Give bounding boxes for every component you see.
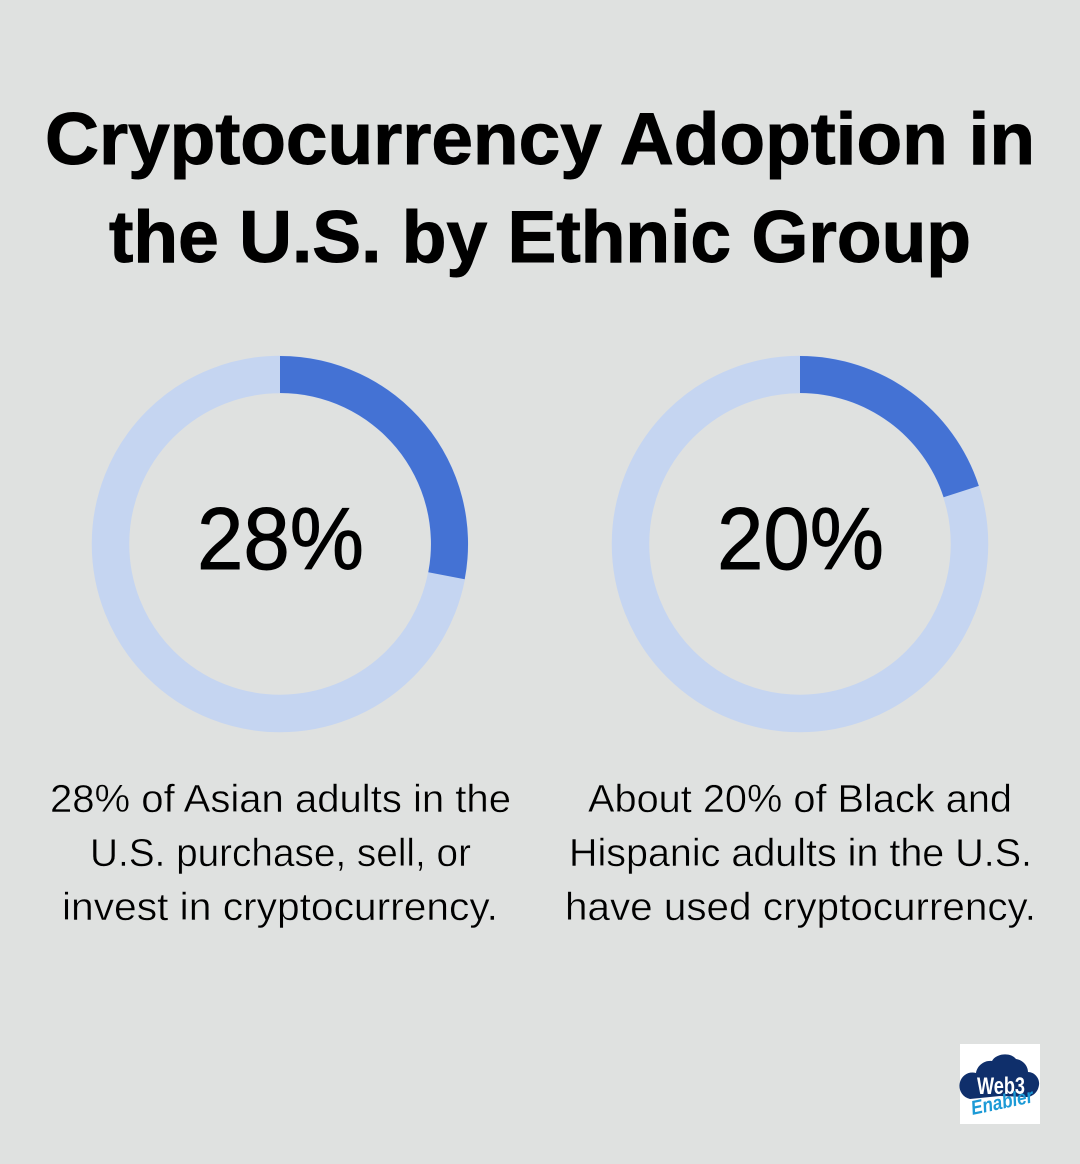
- logo wordmark: Enabler: [969, 1085, 1036, 1120]
- logo: Web3 Enabler: [959, 1044, 1040, 1124]
- description: Black and Hispanic adults: Hispanic adults in the U.S.: [569, 832, 1032, 875]
- description: Black and Hispanic adults: have used cryptocurrency.: [565, 886, 1036, 929]
- donut chart: 20%: [630, 356, 979, 714]
- description: Black and Hispanic adults: [565, 778, 1036, 929]
- description: Asian adults: U.S. purchase, sell, or: [90, 832, 471, 875]
- icon: cloud: [959, 1054, 1039, 1099]
- description: Asian adults: [50, 778, 511, 929]
- logo wordmark: Web3: [977, 1073, 1025, 1100]
- title: Cryptocurrency Adoption in: [45, 99, 1035, 180]
- panel: Asian adults statistic: [50, 356, 511, 929]
- description: Asian adults: invest in cryptocurrency.: [62, 886, 498, 929]
- panel: Black and Hispanic adults statistic: [565, 356, 1036, 929]
- value: 20%: 20%: [717, 489, 884, 588]
- title: the U.S. by Ethnic Group: [109, 197, 971, 278]
- donut chart: 28%: [110, 356, 468, 714]
- description: Black and Hispanic adults: About 20% of Black and: [588, 778, 1012, 821]
- title: [45, 99, 1035, 278]
- value: 28%: 28%: [197, 489, 364, 588]
- description: Asian adults: 28% of Asian adults in the: [50, 778, 511, 821]
